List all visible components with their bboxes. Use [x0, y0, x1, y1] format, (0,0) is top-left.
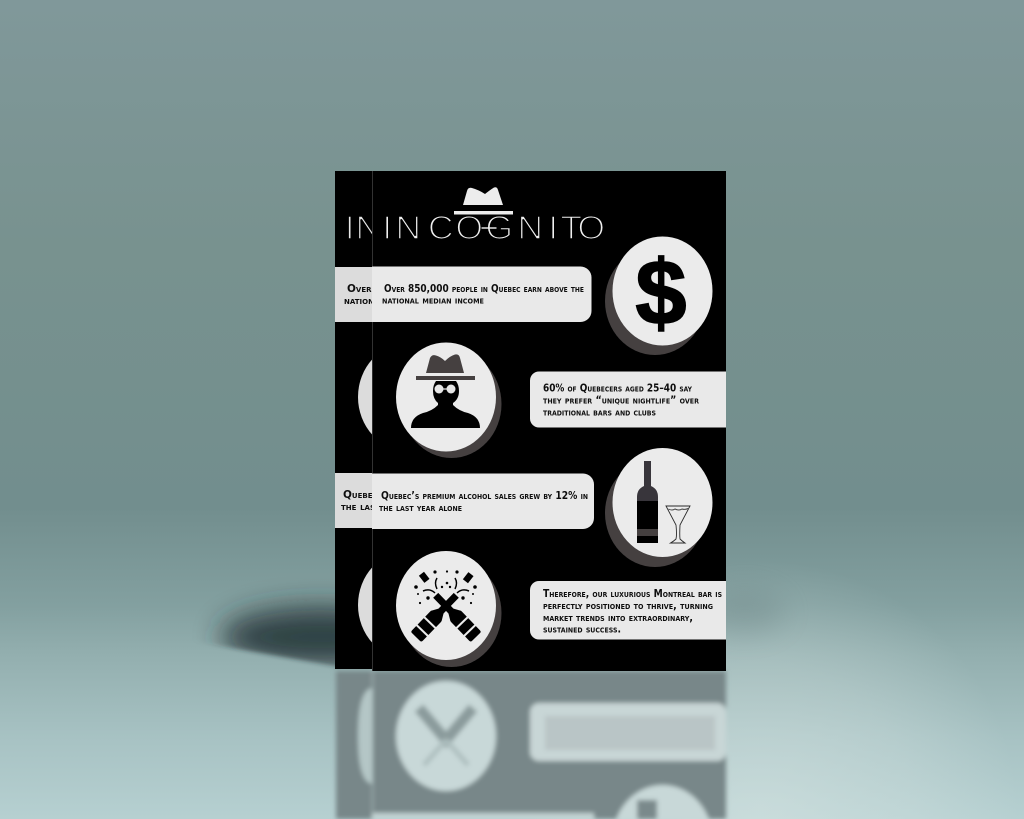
back poster bubble one: nation [344, 295, 374, 307]
left bottle [411, 592, 459, 642]
ground shadow [220, 590, 785, 667]
bubble: income: Over 850,000 people in Quebec earn above the [384, 283, 584, 295]
bubble: alcohol sales: the last year alone [379, 502, 462, 514]
logo: hat and wordmark [386, 187, 602, 238]
back poster circle two [358, 568, 372, 642]
bubble: conclusion [530, 581, 736, 640]
icon: hat [454, 187, 513, 214]
right bottle [433, 592, 481, 642]
bubble: nightlife: 60% of Quebecers aged 25–40 say [543, 382, 693, 394]
back poster [335, 171, 372, 669]
corks and confetti [414, 570, 477, 604]
bubble: nightlife: traditional bars and clubs [543, 406, 656, 418]
bubble: income [362, 266, 592, 322]
back poster title fragment: IN [345, 210, 381, 246]
back poster bubble one [335, 267, 372, 322]
icon: champagne bottles [396, 551, 502, 667]
icon: dollar coin [605, 236, 712, 355]
bubble: conclusion: sustained success. [543, 624, 621, 636]
floor reflection [336, 671, 726, 819]
back poster bubble two: the last [341, 501, 380, 513]
bubble: alcohol sales [362, 474, 594, 529]
bubble: income: national median income [382, 294, 484, 306]
back poster bubble one: Over 8 [347, 283, 382, 295]
bubble: nightlife: they prefer “unique nightlife” over [543, 394, 700, 406]
back poster bubble two [335, 473, 372, 528]
icon: wine bottle and martini [605, 448, 712, 567]
bubble: nightlife [530, 372, 736, 428]
bubble: conclusion: Therefore, our luxurious Montreal bar is [543, 588, 722, 600]
icon: dollar coin: $ [635, 242, 687, 344]
title: INCOGNITO: INCOGNITO [382, 210, 605, 246]
back poster circle one [358, 360, 372, 434]
bubble: alcohol sales: Quebec’s premium alcohol sales grew by 12% in [381, 490, 588, 502]
glasses bridge [482, 227, 496, 229]
bubble: conclusion: perfectly positioned to thrive, turning [543, 600, 713, 612]
icon: hat man [396, 342, 502, 458]
back poster bubble two: Quebec [343, 489, 378, 501]
front poster [362, 171, 736, 671]
bubble: conclusion: market trends into extraordinary, [543, 612, 693, 624]
